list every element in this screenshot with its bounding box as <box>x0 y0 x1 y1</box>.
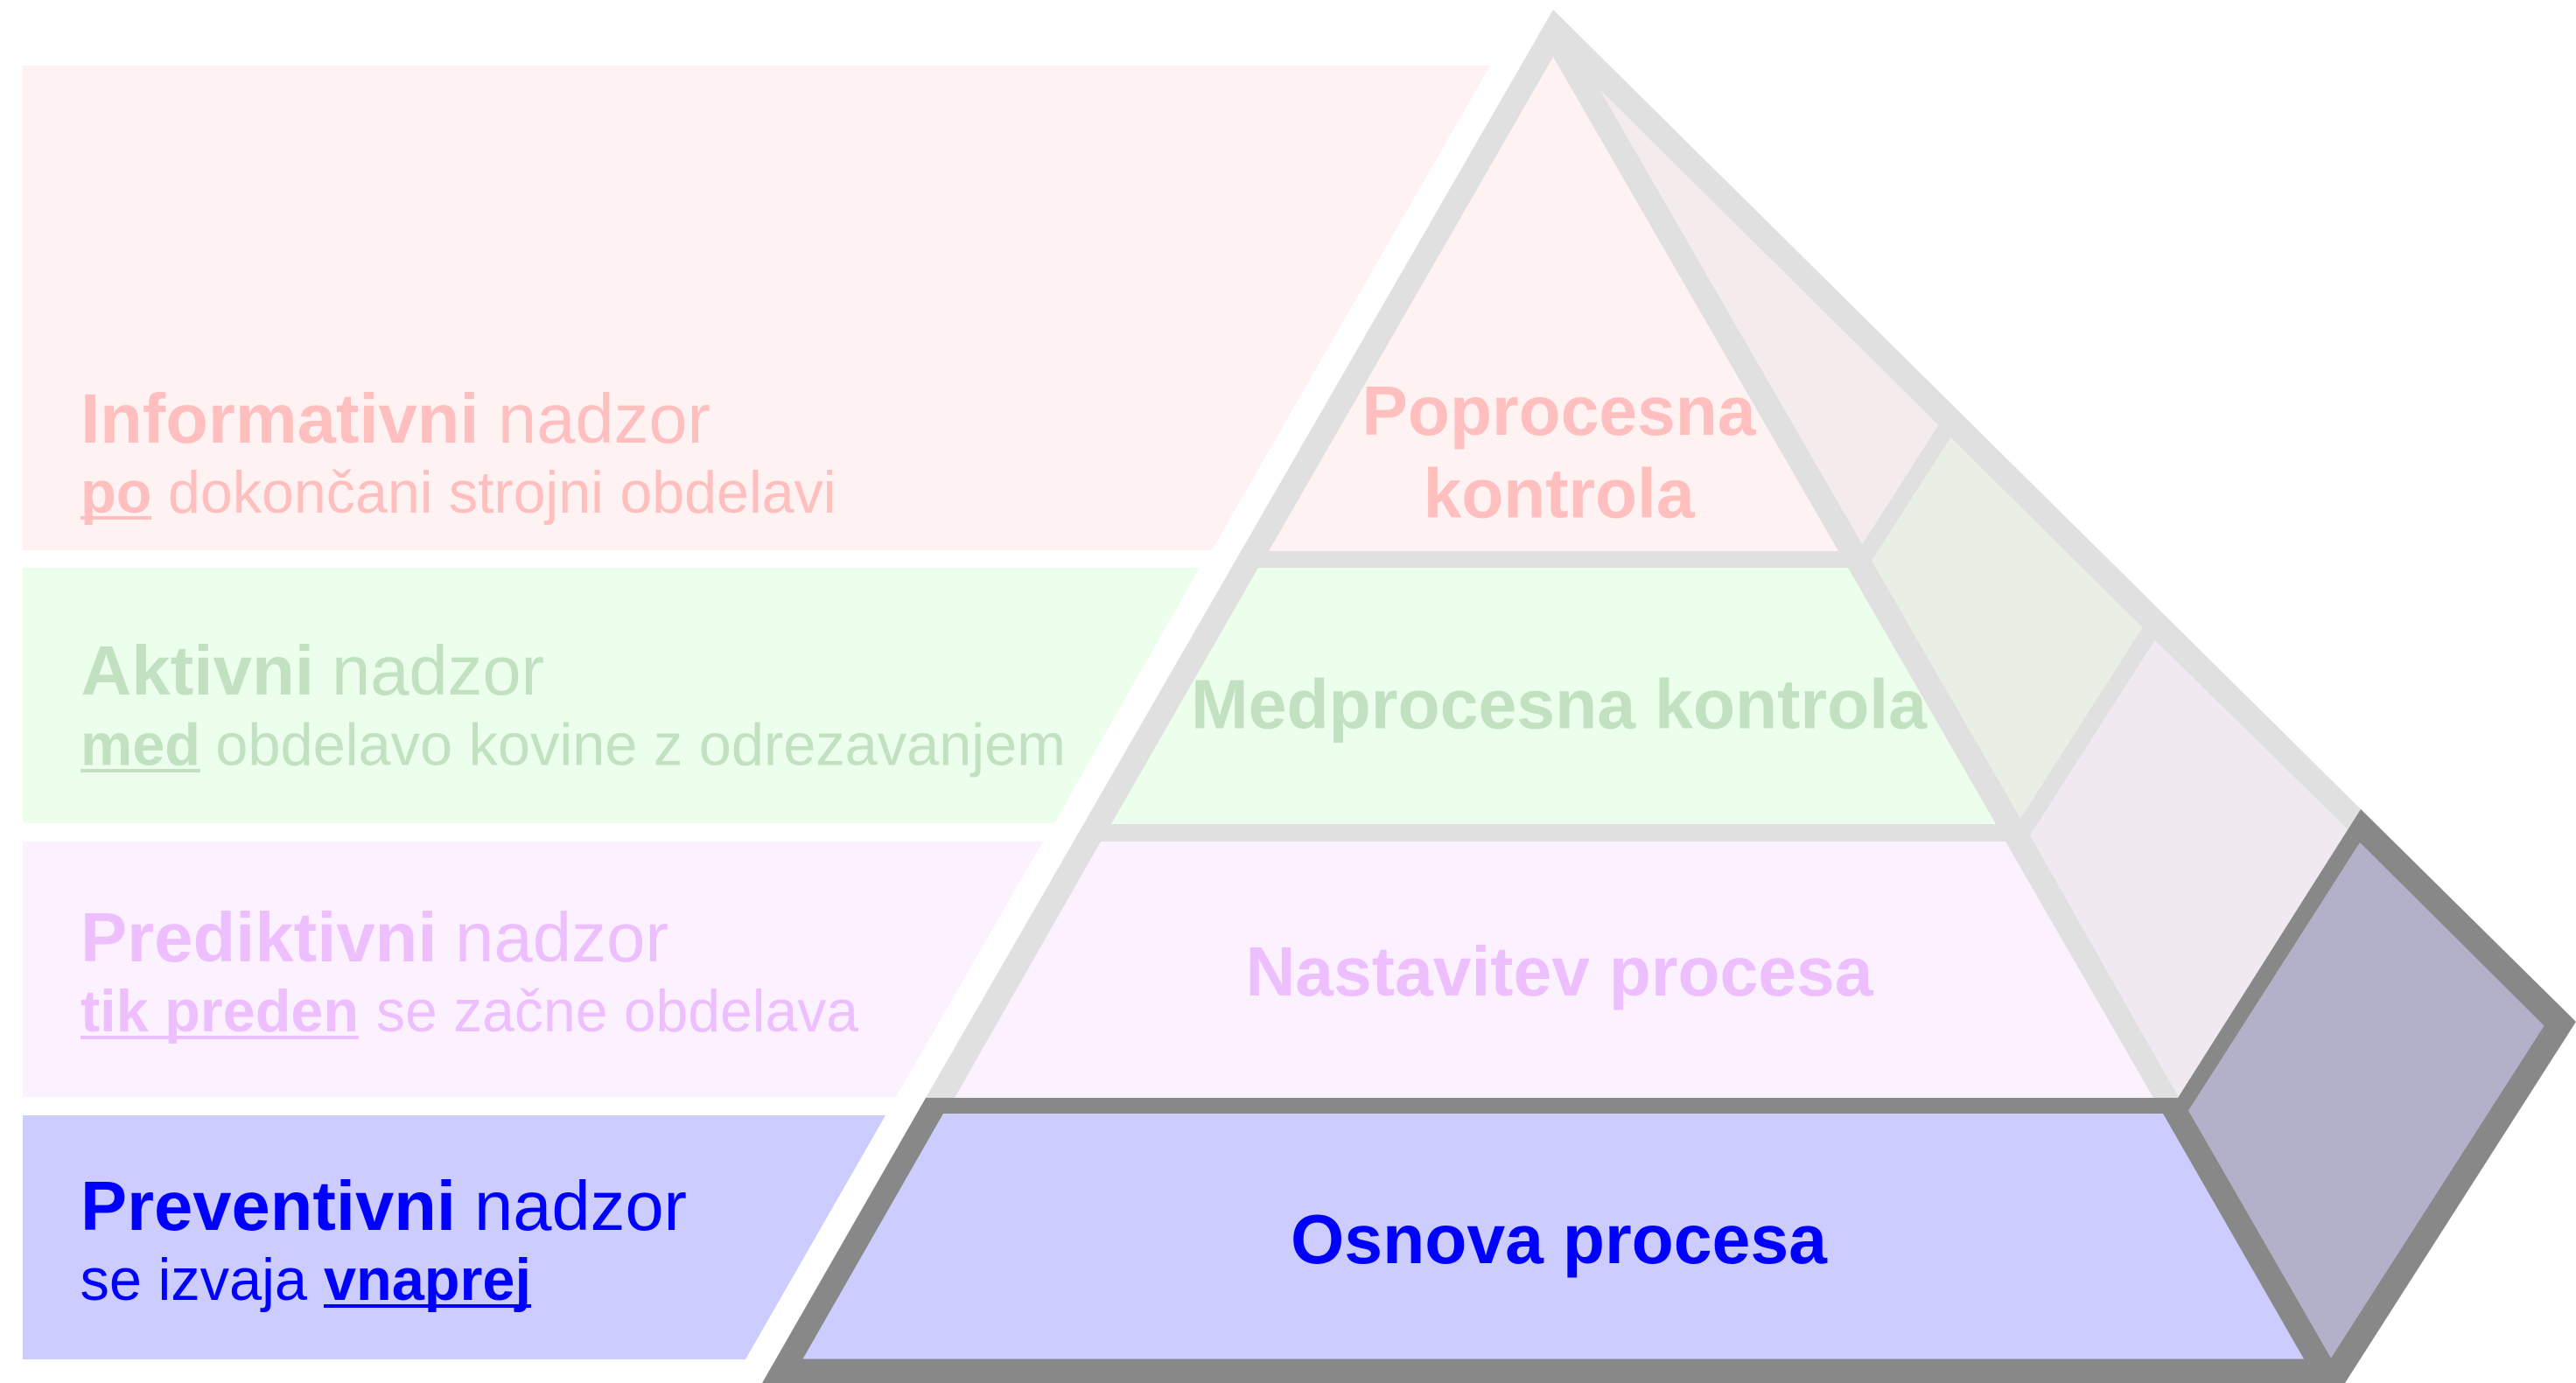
side face: upper base level <box>2030 640 2348 1097</box>
label: poprocesna kontrola <box>1362 372 1756 532</box>
pyramid face: base level <box>803 1114 2304 1359</box>
label: osnova procesa: Osnova procesa <box>1291 1200 1827 1278</box>
heading: prediktivni nadzor: nadzor <box>455 898 668 976</box>
side face: top level <box>1600 89 1938 544</box>
heading: aktivni nadzor: nadzor <box>332 632 544 709</box>
text: se izvaja vnaprej: vnaprej <box>324 1247 531 1313</box>
panel: preventive monitoring <box>23 1115 886 1359</box>
label: poprocesna kontrola: Poprocesna <box>1362 372 1756 450</box>
heading: preventivni nadzor <box>80 1167 687 1245</box>
heading: aktivni nadzor <box>80 632 544 709</box>
text: po dokončani strojni obdelavi: dokončani strojni obdelavi <box>168 459 836 526</box>
text: tik preden se začne obdelava: se začne obdelava <box>376 978 858 1044</box>
panel: informative monitoring <box>23 66 1490 550</box>
pyramid face: upper base level <box>955 842 2153 1098</box>
text: se izvaja vnaprej: se izvaja <box>80 1247 307 1313</box>
heading: informativni nadzor <box>80 380 710 458</box>
panel: predictive monitoring <box>23 842 1043 1097</box>
heading: informativni nadzor: Informativni <box>80 380 480 458</box>
pyramid: upper light frame <box>926 10 2361 1098</box>
side face: middle level <box>1872 437 2143 819</box>
text: tik preden se začne obdelava <box>80 978 858 1044</box>
pyramid face: top level <box>1269 57 1838 551</box>
panel: active monitoring <box>23 568 1200 823</box>
pyramid: base frame <box>762 809 2576 1383</box>
heading: aktivni nadzor: Aktivni <box>80 632 314 709</box>
heading: informativni nadzor: nadzor <box>498 380 710 458</box>
label: poprocesna kontrola: kontrola <box>1424 455 1695 532</box>
text: tik preden se začne obdelava: tik preden <box>80 978 359 1044</box>
side face: base level <box>2188 842 2544 1359</box>
text: po dokončani strojni obdelavi: po <box>80 459 152 526</box>
heading: preventivni nadzor: nadzor <box>474 1167 687 1245</box>
pyramid face: middle level <box>1111 568 1996 824</box>
text: se izvaja vnaprej <box>80 1247 531 1313</box>
heading: preventivni nadzor: Preventivni <box>80 1167 456 1245</box>
label: nastavitev procesa: Nastavitev procesa <box>1246 932 1873 1010</box>
heading: prediktivni nadzor <box>80 898 668 976</box>
label: medprocesna kontrola: Medprocesna kontrola <box>1191 665 1928 744</box>
text: med obdelavo kovine z odrezavanjem: med <box>80 712 200 779</box>
heading: prediktivni nadzor: Prediktivni <box>80 898 438 976</box>
text: med obdelavo kovine z odrezavanjem: obdelavo kovine z odrezavanjem <box>215 712 1066 779</box>
